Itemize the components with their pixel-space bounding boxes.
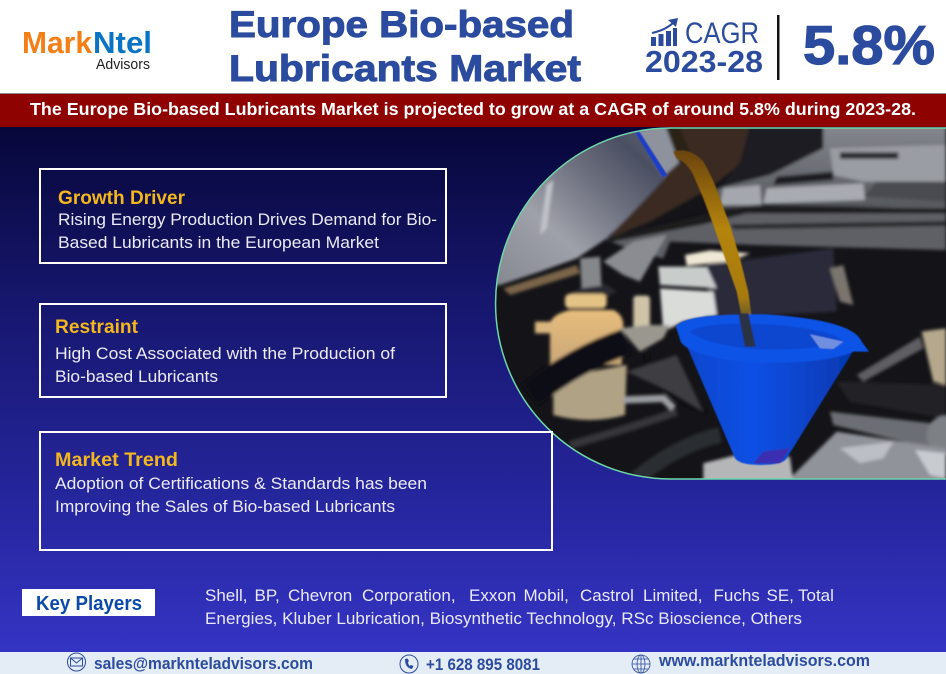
panel: growth driver: Growth Driver [58,188,186,209]
dark area above engine cover [720,125,827,188]
white brake reservoir [658,267,717,288]
panel: restraint: Bio-based Lubricants [55,367,218,386]
panel: growth driver [40,169,446,263]
main gradient background [0,127,946,653]
photo: oil poured into funnel over car engine [490,125,946,485]
bottle neck [637,125,680,177]
dark blue tank behind stream [707,248,837,318]
key players list: SE, [766,586,794,605]
red banner [0,93,946,127]
key players list: Limited, [643,586,703,605]
panel: market trend: Improving the Sales of Bio-based Lubricants [55,497,395,516]
coil spring post [580,257,602,290]
CAGR label: 2023-28 [645,44,763,79]
cream fluid reservoir [550,310,623,365]
panel: restraint [40,304,446,397]
green photo outline [496,128,946,479]
key players list [205,586,834,628]
lower hoses [570,412,677,445]
key players label: Key Players [36,593,142,615]
title: Lubricants Market [229,48,581,89]
neck lip [665,125,690,163]
CAGR label: CAGR [685,17,759,50]
key players list: Castrol [580,586,634,605]
cross member [607,207,946,258]
phone contact: +1 628 895 8081 [426,655,540,674]
bracket below bottle [603,235,667,282]
white header band [0,0,946,94]
key players list: Corporation, [362,586,456,605]
black rubber hose [530,342,627,395]
panel: market trend: Market Trend [55,450,178,471]
panel: growth driver: Rising Energy Production Drives Demand for Bio- [58,210,437,229]
CAGR label [645,17,763,79]
key players list: Exxon [469,586,516,605]
key players list: Chevron [288,586,352,605]
icon: rising bar chart [651,18,678,46]
contact footer [0,651,946,674]
key players list: Mobil, [524,586,569,605]
key players list: Fuchs [714,586,760,605]
panel: growth driver: Based Lubricants in the European Market [58,233,379,252]
logo: MarkNtel Advisors: Advisors [96,56,150,73]
panel: market trend [40,432,552,550]
key players list: BP, [254,586,280,605]
right side parts [830,265,853,305]
title [229,4,581,89]
logo: MarkNtel Advisors [22,25,152,73]
panel: market trend: Adoption of Certifications & Standards has been [55,474,427,493]
blue funnel [685,342,855,465]
CAGR value: 5.8% [803,14,935,76]
key players list: Total [798,586,834,605]
oil stream [673,150,756,347]
bottle body [490,125,667,285]
email contact: sales@marknteladvisors.com [94,654,313,673]
panel: restraint: Restraint [55,317,139,338]
engine block lower right [787,432,946,482]
engine cover upper right [710,125,946,210]
tan strip under bottle [503,265,580,295]
logo: MarkNtel Advisors: Ntel [93,25,152,60]
key players list: Shell, [205,586,248,605]
title: Europe Bio-based [229,4,574,45]
logo: MarkNtel Advisors: Mark [22,25,93,60]
website contact: www.marknteladvisors.com [658,651,870,670]
red banner: The Europe Bio-based Lubricants Market is projected to grow at a CAGR of around 5.8% during 2023-28. [30,99,916,119]
key players list: Energies, Kluber Lubrication, Biosynthetic Technology, RSc Bioscience, Others [205,609,802,628]
brown backdrop behind bottle [610,125,753,238]
divider [777,15,780,80]
key players label [22,589,155,616]
panel: restraint: High Cost Associated with the Production of [55,344,395,363]
blue edge of bottle neck [635,132,667,178]
